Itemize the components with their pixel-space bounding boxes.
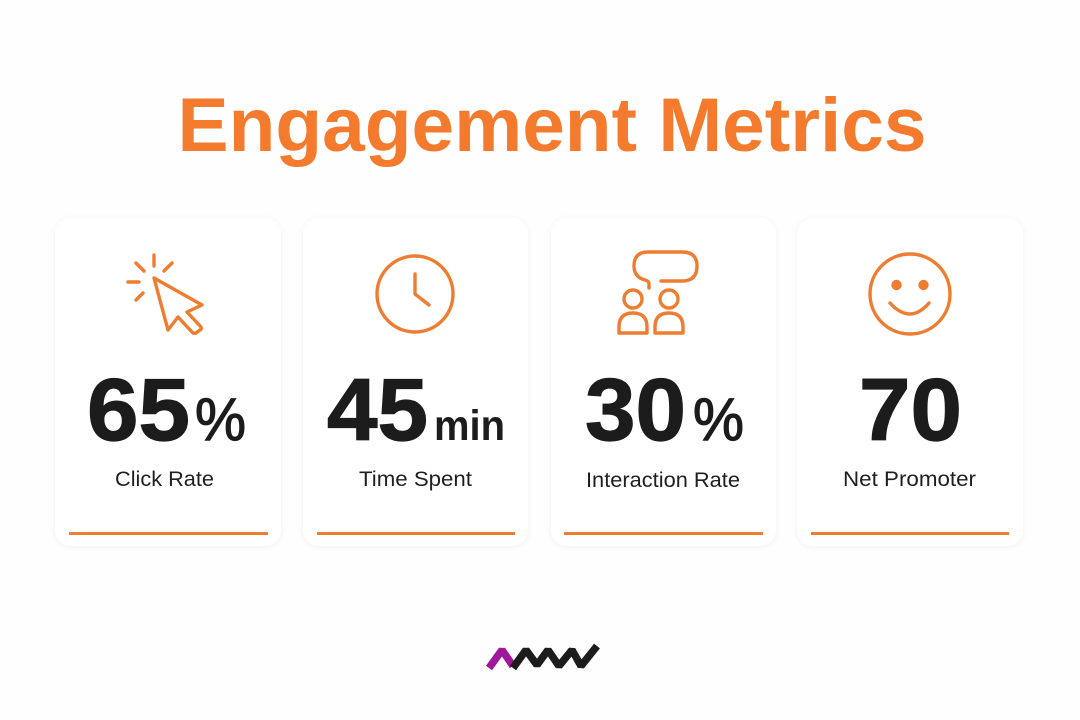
icon: clock <box>377 256 453 332</box>
label: Interaction Rate: Interaction Rate <box>586 469 740 492</box>
value: 45 min: min <box>434 402 505 450</box>
label: Net Promoter: Net Promoter <box>843 468 976 491</box>
value: 65% <box>87 360 246 459</box>
accent bar <box>317 532 515 535</box>
icon: two people talking <box>619 252 697 333</box>
value: 30%: % <box>693 386 744 453</box>
value: 45 min: 45 <box>327 360 428 459</box>
icon: cursor click <box>128 255 202 333</box>
value: 65%: 65 <box>87 360 190 459</box>
panel: click rate <box>55 218 281 546</box>
label: Time Spent: Time Spent <box>359 468 472 491</box>
title: Engagement Metrics <box>178 83 926 168</box>
label: Click Rate: Click Rate <box>115 468 214 491</box>
panel: time spent <box>303 218 528 546</box>
value: 70: 70 <box>859 360 962 459</box>
value: 45 min <box>327 360 505 459</box>
accent bar <box>811 532 1009 535</box>
accent bar <box>564 532 763 535</box>
value: 65%: % <box>195 386 246 453</box>
value: 30% <box>585 360 744 459</box>
logo <box>489 646 597 668</box>
panel: net promoter <box>797 218 1023 546</box>
panel: interaction rate <box>551 218 776 546</box>
icon: smiley <box>870 254 950 334</box>
accent bar <box>69 532 268 535</box>
value: 30%: 30 <box>585 360 686 459</box>
